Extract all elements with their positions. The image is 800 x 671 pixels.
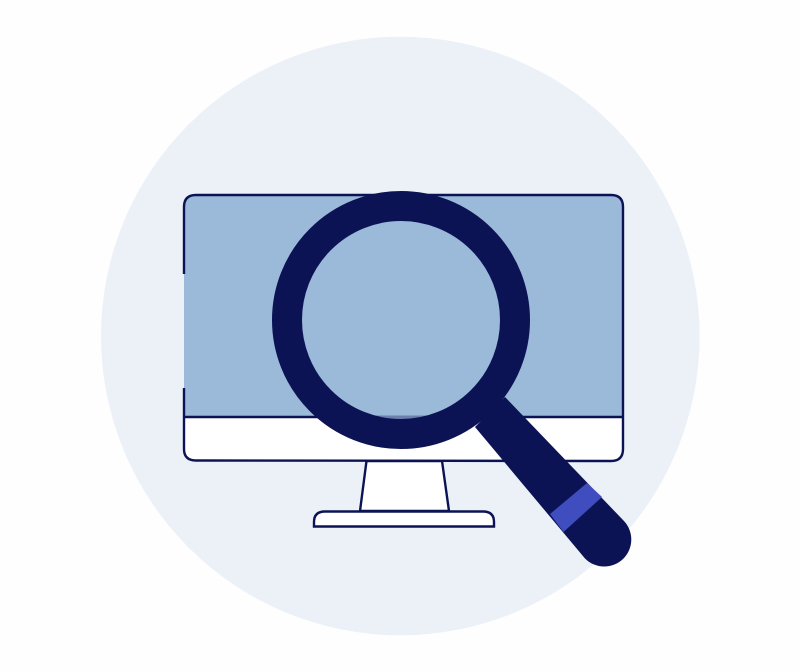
handle accent band bbox=[550, 483, 602, 532]
magnifier lens ring bbox=[287, 206, 515, 434]
monitor stand neck bbox=[360, 461, 449, 511]
magnifier handle bbox=[475, 397, 631, 567]
monitor chin bbox=[184, 417, 623, 461]
icon: magnifying glass bbox=[287, 206, 631, 567]
monitor outline bbox=[184, 195, 623, 461]
lens bottom shading bbox=[376, 416, 426, 419]
monitor screen bbox=[184, 195, 623, 417]
monitor stand base bbox=[314, 512, 494, 526]
icon: computer monitor bbox=[184, 195, 623, 526]
background circle bbox=[101, 37, 700, 635]
illustration: monitor under magnifying glass bbox=[101, 36, 700, 636]
